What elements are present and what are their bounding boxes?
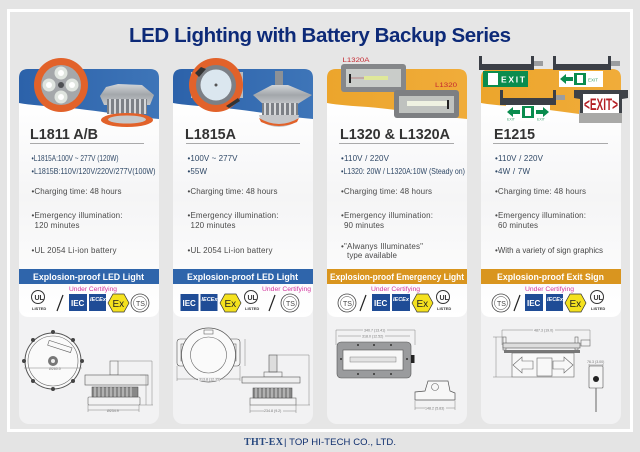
spec list: •4W / 7W (495, 167, 530, 176)
certification marks: UL (248, 295, 258, 302)
dimension drawing (336, 328, 455, 410)
certification marks: Under Certifying (371, 287, 420, 293)
spec list: •Emergency illumination: (341, 211, 433, 220)
dimension drawing (177, 328, 310, 413)
header band: amber (481, 69, 621, 119)
header band: blue (173, 69, 313, 119)
icon: double arrow exit sign: EXIT (537, 118, 546, 122)
certification marks: Ex (112, 299, 124, 310)
spec list: •55W (188, 167, 207, 176)
panel: L1320 and L1320A (327, 57, 467, 424)
certification marks: TS (286, 301, 295, 308)
icon: L1320A fixture: L1320A (342, 57, 370, 64)
certification marks: UL (440, 295, 450, 302)
certification marks: IECEx (202, 297, 218, 303)
certification marks: UL (34, 295, 45, 302)
icon: fixture side view (100, 84, 154, 127)
spec list: •Emergency illumination: (495, 211, 586, 220)
dimension drawing: 76.3 (3.00) (587, 360, 604, 364)
header band: amber (327, 69, 467, 119)
spec list: •110V / 220V (341, 154, 390, 163)
spec list: 60 minutes (498, 221, 538, 230)
model name: L1811 A/B (30, 127, 98, 143)
certification marks: Under Certifying (69, 287, 117, 293)
certification marks: Under Certifying (525, 287, 574, 293)
spec list: •With a variety of sign graphics (495, 246, 603, 255)
spec list: •L1815A:100V ~ 277V (120W) (32, 154, 119, 163)
model name: L1815A (185, 127, 237, 143)
icon: red exit sign (574, 90, 628, 123)
icon: double arrow exit sign (500, 90, 565, 122)
ribbon (327, 269, 467, 284)
spec list: 90 minutes (344, 221, 384, 230)
spec list (188, 154, 278, 255)
spec list: •Charging time: 48 hours (32, 187, 122, 196)
certification marks: IEC (182, 299, 196, 308)
panel: E1215 (479, 56, 628, 424)
ribbon (19, 269, 159, 284)
dimension drawing: 487.3 (19.0) (534, 328, 553, 332)
certification marks: IECEx (547, 297, 564, 303)
certification marks: TS (136, 301, 145, 308)
model name: L1320 & L1320A (340, 127, 451, 143)
ribbon: Explosion-proof Emergency Light (330, 272, 464, 282)
panel: L1811 A/B (19, 58, 159, 424)
certification marks: LISTED (32, 306, 46, 311)
certification marks (32, 287, 149, 312)
spec list: •110V / 220V (495, 154, 544, 163)
spec list: •UL 2054 Li-ion battery (188, 246, 272, 255)
icon: red exit sign: <EXIT> (584, 95, 618, 114)
title: LED Lighting with Battery Backup Series (129, 24, 511, 47)
icon: L1320 fixture (394, 82, 459, 118)
icon: fixture side view (253, 71, 312, 127)
spec list: type available (347, 251, 398, 260)
icon: green exit sign (479, 56, 543, 87)
spec list: •UL 2054 Li-ion battery (32, 246, 116, 255)
dimension drawing (493, 328, 604, 412)
dimension drawing: 340.7 (13.41) (364, 328, 385, 332)
dimension drawing: 234.8 (9.2) (264, 409, 281, 413)
certification marks: LISTED (591, 306, 605, 311)
spec list: •"Alwanys Illuminates" (341, 242, 423, 251)
icon: round LED fixture (189, 58, 243, 112)
certification marks: LISTED (437, 306, 451, 311)
certification marks (180, 287, 311, 312)
spec list (32, 154, 156, 255)
certification marks: TS (343, 301, 352, 308)
panel: L1815A (173, 58, 313, 424)
certification marks: Ex (570, 299, 581, 310)
spec list (341, 154, 465, 260)
dimension drawing: Ø234.9 (107, 409, 119, 413)
icon: white exit sign with left arrow (553, 56, 620, 87)
certification marks: IEC (71, 299, 85, 308)
spec list: 120 minutes (190, 221, 236, 230)
ribbon (173, 269, 313, 284)
certification marks (492, 287, 605, 312)
ribbon: Explosion-proof Exit Sign (497, 272, 604, 282)
spec list: •Emergency illumination: (188, 211, 278, 220)
spec list: •L1320: 20W / L1320A:10W (Steady on) (341, 167, 465, 176)
ribbon (481, 269, 621, 284)
dimension drawing: Ø260.0 (49, 367, 61, 371)
certification marks: Ex (224, 299, 236, 310)
icon: round LED fixture (34, 58, 88, 112)
dimension drawing: 148.2 (5.83) (425, 406, 444, 410)
footer: | TOP HI-TECH CO., LTD. (284, 437, 396, 448)
certification marks: IEC (527, 299, 541, 308)
icon: white exit sign with left arrow: EXIT (588, 78, 598, 82)
icon: L1320 fixture: L1320 (435, 82, 457, 89)
certification marks: UL (594, 295, 604, 302)
dimension drawing (22, 330, 153, 413)
spec list: •100V ~ 277V (188, 154, 238, 163)
spec list: •Charging time: 48 hours (188, 187, 278, 196)
icon: green exit sign: EXIT (501, 74, 526, 84)
certification marks: Under Certifying (262, 287, 311, 293)
certification marks: Ex (416, 299, 428, 310)
certification marks: LISTED (245, 306, 259, 311)
header band: blue (19, 69, 159, 119)
ribbon: Explosion-proof LED Light (187, 272, 298, 282)
dimension drawing: 318.0 (12.52) (362, 334, 383, 338)
icon: double arrow exit sign: EXIT (507, 118, 516, 122)
footer: THT-EX (244, 437, 284, 448)
spec list: •Charging time: 48 hours (341, 187, 432, 196)
spec list: •Emergency illumination: (32, 211, 122, 220)
icon: L1320A fixture (341, 57, 406, 92)
spec list (495, 154, 603, 255)
certification marks: IECEx (90, 297, 107, 303)
spec list: •Charging time: 48 hours (495, 187, 586, 196)
dimension drawing: 313.8 (12.35) (199, 378, 220, 382)
model name: E1215 (494, 127, 535, 143)
spec list: •L1815B:110V/120V/220V/277V(100W) (32, 167, 156, 176)
certification marks: IEC (374, 299, 388, 308)
ribbon: Explosion-proof LED Light (33, 272, 144, 282)
certification marks (338, 287, 451, 312)
certification marks: TS (497, 301, 506, 308)
spec list: 120 minutes (34, 221, 80, 230)
certification marks: IECEx (393, 297, 410, 303)
